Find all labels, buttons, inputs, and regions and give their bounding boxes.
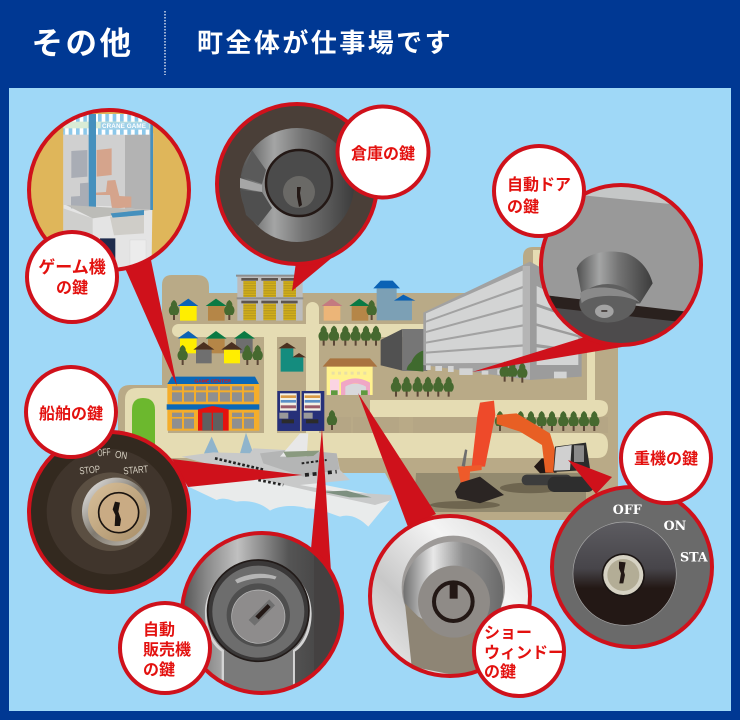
dark building [381, 329, 427, 372]
label: game machine key: の鍵 [56, 279, 88, 297]
circle: heavy machine lock: OFF [613, 502, 642, 517]
houses upper row [178, 299, 370, 363]
label: automatic door key [494, 146, 584, 236]
circle: heavy machine lock: ON [664, 518, 687, 533]
pointer: game machine [124, 260, 177, 386]
label: automatic door key: 自動ドア [507, 175, 571, 194]
label: automatic door key: の鍵 [507, 198, 539, 216]
label: vending machine key: 自動 [143, 620, 175, 639]
trees near office [495, 362, 599, 431]
circle: game machine: CRANE GAME [102, 123, 146, 130]
shop [323, 358, 377, 395]
header divider [164, 11, 166, 75]
circle: ship lock [25, 428, 195, 598]
circle: ship lock: START [123, 464, 149, 477]
trees [169, 300, 454, 430]
circle: ship lock: STOP [79, 464, 101, 477]
pointer: automatic door [472, 337, 622, 372]
ship [182, 433, 392, 527]
excavator yard [415, 473, 586, 512]
pointer: warehouse [292, 256, 334, 291]
office building [423, 262, 582, 380]
label: warehouse key: 倉庫の鍵 [351, 144, 415, 163]
pointer: ship [172, 459, 302, 487]
label: vending machine key: 販売機 [143, 640, 191, 659]
game center: GAME CENTER [194, 378, 231, 384]
circle: automatic door lock [539, 183, 703, 347]
title: その他 [32, 25, 134, 61]
label: ship key [26, 367, 116, 457]
pointer: vending machine [311, 428, 331, 572]
label: game machine key [27, 232, 117, 322]
label: vending machine key [120, 603, 210, 693]
circle: game machine [27, 108, 191, 272]
road blocks [325, 417, 608, 433]
circle: heavy machine lock [548, 483, 718, 653]
label: show window key [474, 606, 564, 696]
subtitle: 町全体が仕事場です [197, 28, 453, 58]
label: show window key: ウィンドー [484, 644, 564, 662]
pointer: heavy machine [568, 460, 612, 494]
circle: warehouse lock [215, 102, 378, 266]
label: heavy machine key [621, 413, 711, 503]
circle: ship lock: ON [114, 450, 128, 462]
label: show window key: ショー [484, 625, 532, 642]
warehouse building [236, 275, 304, 321]
label: game machine key: ゲーム機 [38, 258, 106, 277]
blue tall house [373, 281, 415, 320]
circle: vending machine lock [178, 530, 348, 700]
circle: ship lock: OFF [97, 447, 111, 459]
label: ship key: 船舶の鍵 [39, 405, 103, 423]
game center [167, 377, 259, 431]
vending machines [277, 391, 324, 431]
label: heavy machine key: 重機の鍵 [634, 449, 698, 468]
park [132, 398, 155, 445]
circle: show window lock [368, 514, 532, 678]
pointers [124, 256, 622, 572]
town map [118, 247, 618, 527]
teal house [278, 343, 306, 372]
label: show window key: の鍵 [484, 663, 516, 681]
label: vending machine key: の鍵 [143, 661, 175, 679]
label: warehouse key [338, 106, 428, 198]
ground [118, 247, 618, 520]
roads [125, 250, 608, 462]
pointer: show window [358, 393, 436, 527]
excavator [430, 401, 594, 509]
circle: heavy machine lock: STA [680, 549, 708, 564]
